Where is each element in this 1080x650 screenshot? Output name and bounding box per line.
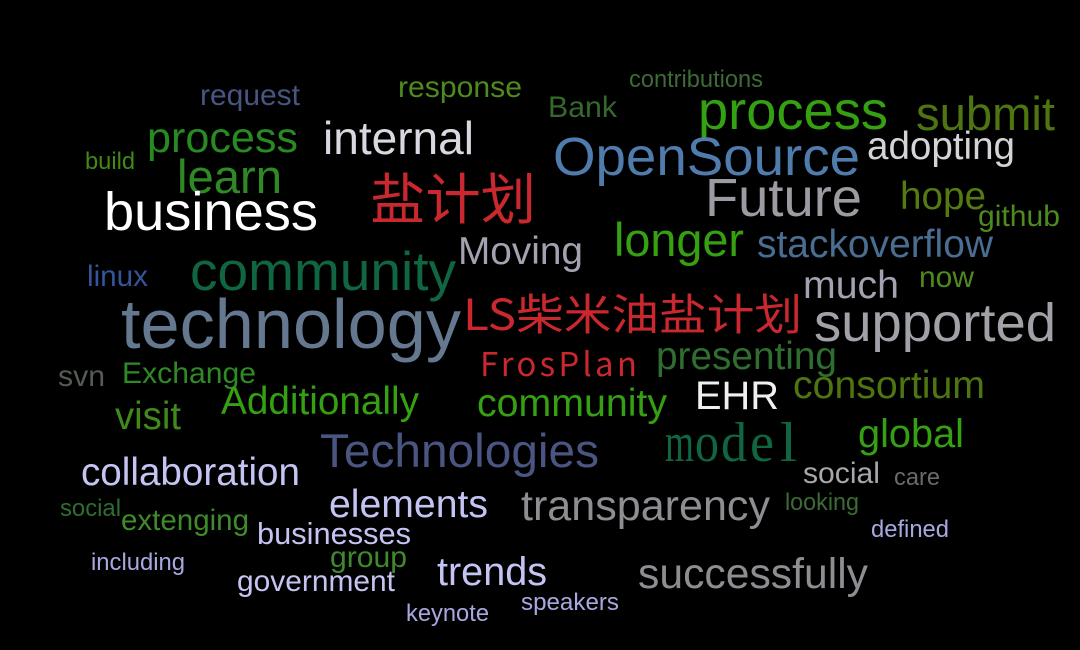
word: model: o [695,412,719,474]
word: response: response [398,71,522,104]
word: much: much [803,264,899,307]
word: 盐计划: 盐计划 [370,155,536,235]
word: supported: supported [814,293,1056,353]
word: visit: visit [115,395,181,438]
word: collaboration: collaboration [81,451,300,494]
word: successfully: successfully [638,550,868,598]
word: technology: technology [121,285,461,363]
word: submit: submit [916,87,1055,140]
word: Bank: Bank [548,91,618,124]
word: contributions: contributions [629,66,763,93]
word: social small: social [60,495,121,522]
word: Technologies: Technologies [320,424,599,477]
word: internal: internal [323,112,474,164]
word: speakers: speakers [521,589,619,616]
word: Moving: Moving [458,230,583,273]
word: presenting: presenting [656,335,837,378]
word: Exchange: Exchange [122,357,256,390]
word: Additionally: Additionally [221,380,419,423]
word: LS柴米油盐计划: LS柴米油盐计划 [463,281,802,343]
word: model: m [665,412,694,474]
word: model: e [750,412,774,474]
word: group: group [330,541,407,574]
word: longer: longer [614,213,744,266]
word: EHR: EHR [695,374,779,418]
word: government: government [237,565,396,598]
word: OpenSource: OpenSource [553,127,860,187]
word: process large: process [698,81,888,141]
word: trends: trends [437,550,547,594]
word: process: process [147,114,298,162]
word: FrosPlan: FrosPlan [480,338,637,386]
word: elements: elements [329,483,488,526]
word: extenging: extenging [121,504,249,537]
word: build: build [85,148,135,175]
word: defined: defined [871,516,949,543]
word: including: including [91,549,185,576]
word: Future: Future [705,168,862,228]
word: businesses: businesses [257,516,411,551]
word: looking: looking [785,489,859,516]
word: consortium: consortium [793,364,985,407]
word: community: community [477,382,668,425]
word: now: now [919,261,974,294]
word: svn: svn [58,360,105,393]
word: business: business [104,182,318,242]
word: adopting: adopting [867,125,1015,168]
word: community large: community [190,240,456,302]
word: transparency: transparency [521,482,770,530]
word: learn: learn [177,150,282,203]
word: hope: hope [900,175,986,218]
word: github: github [978,200,1060,233]
word: stackoverflow: stackoverflow [757,223,994,266]
word: keynote: keynote [406,600,489,627]
word: request: request [200,79,301,112]
word: global: global [858,412,964,456]
word: model: d [721,412,747,474]
word: care: care [894,464,940,491]
word: model [665,412,797,474]
word: social: social [803,457,880,490]
word: model: l [780,412,797,474]
word: linux: linux [87,260,148,293]
